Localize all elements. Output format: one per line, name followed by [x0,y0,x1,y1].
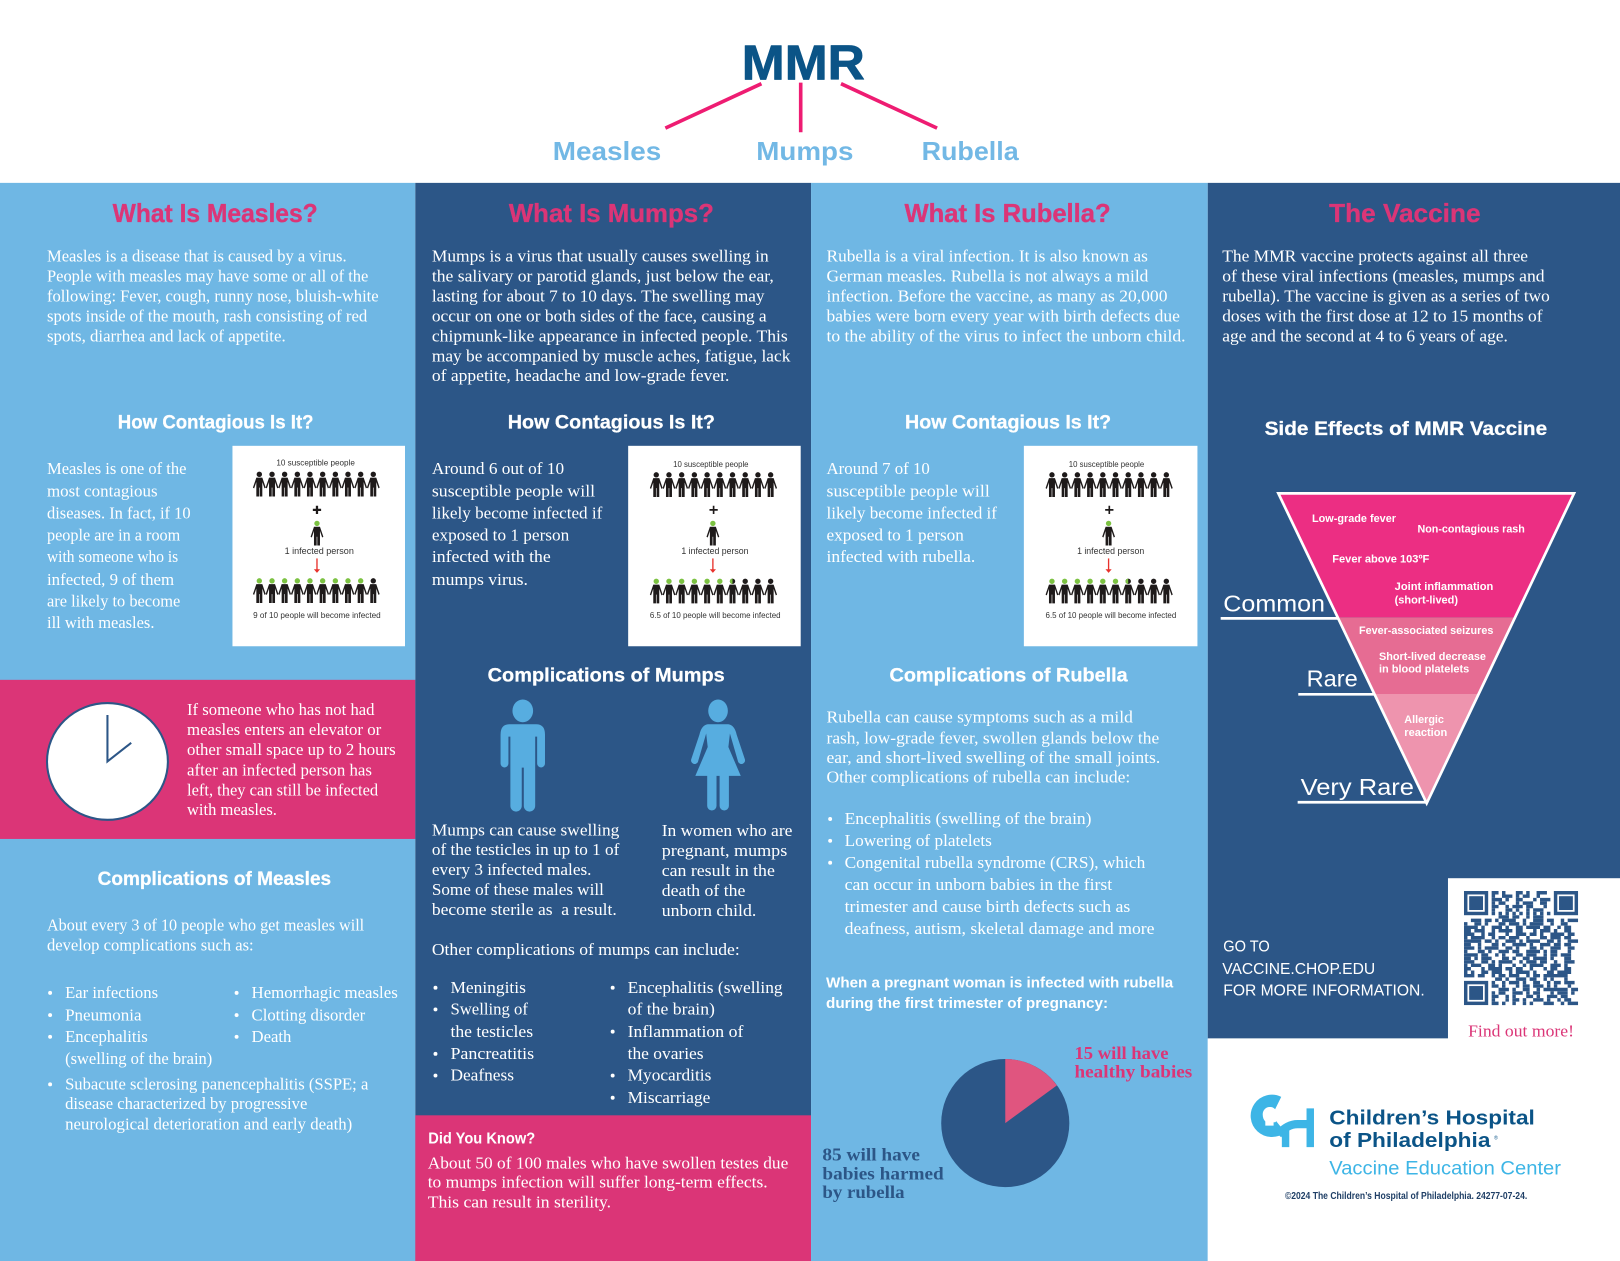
text: copyright: ©2024 The Children’s Hospital of Philadelphia. 24277-07-24. [1285,1191,1527,1202]
panel: vaccine [1208,183,1620,1040]
list: measles complications: Encephalitis [65,1027,148,1046]
label: Rubella: Rubella [922,138,1019,166]
list: measles complications: Ear infections [65,983,158,1002]
heading: complications of rubella: Complications of Rubella [890,664,1129,686]
text: measles contagion: diseases. In fact, if 10 [47,504,191,523]
text: measles contagion: with someone who is [47,547,178,566]
text: measles intro: spots inside of the mouth, rash consisting of red [47,306,368,325]
heading: complications of measles: Complications of Measles [98,868,331,890]
text: mumps intro: Mumps is a virus that usually causes swelling in [432,246,769,265]
labels: common effects: Non-contagious rash [1418,523,1525,535]
list: measles complications: Subacute sclerosing panencephalitis (SSPE; a [65,1074,369,1093]
text: hospital name: ® [1494,1135,1498,1142]
text: airborne note: with measles. [187,800,277,819]
heading: how contagious rubella: How Contagious Is It? [905,411,1111,433]
text: measles contagion: people are in a room [47,525,180,544]
diagram: 6.5 of 10 infected (rubella): 1 infected person [1077,546,1144,556]
callout: did you know: About 50 of 100 males who have swollen testes due [428,1154,788,1173]
list: measles complications: Hemorrhagic measles [252,983,398,1002]
text: rubella intro [827,246,1186,345]
list: rubella complications: can occur in unborn babies in the first [845,875,1113,894]
callout: did you know: to mumps infection will suffer long-term effects. [428,1173,768,1192]
list: measles complications: disease characterized by progressive [65,1094,307,1113]
list: measles complications: Pneumonia [65,1005,142,1024]
icon: CH logo [1258,1102,1310,1147]
chart: side effects pyramid [1221,493,1574,803]
labels: rare effects: Fever-associated seizures [1359,625,1493,637]
text: female complication: unborn child. [662,901,756,920]
text: female complication: In women who are [662,821,792,840]
text: rubella complications intro: ear, and short-lived swelling of the small joints. [827,748,1160,767]
text: mumps contagion: infected with the [432,547,551,566]
list: rubella complications: Lowering of platelets [845,831,992,850]
callout: did you know [415,1115,811,1261]
text: other complications: Other complications of mumps can include: [432,940,740,959]
text: rubella complications intro: rash, low-grade fever, swollen glands below the [827,728,1159,747]
list: mumps complications left [434,978,534,1085]
text: measles contagion [47,459,191,632]
labels: rare effects [1359,625,1493,676]
text: rubella intro: Rubella is a viral infection. It is also known as [827,246,1148,265]
text: complications intro [47,915,365,955]
diagram: 9 of 10 infected: 10 susceptible people [276,458,355,467]
text: vaccine education center: Vaccine Education Center [1329,1157,1561,1179]
list: mumps complications right: Inflammation of [628,1022,744,1041]
text: rubella contagion [827,459,998,566]
label: 15 healthy: healthy babies [1074,1062,1192,1082]
text: mumps intro: occur on one or both sides of the face, causing a [432,306,767,325]
text: mumps intro: of appetite, headache and low-grade fever. [432,366,729,385]
list: measles complications: (swelling of the brain) [65,1049,212,1068]
label: 85 harmed: by rubella [822,1182,905,1202]
labels: common effects: Low-grade fever [1312,513,1397,525]
list: mumps complications left: Deafness [450,1066,514,1085]
list: mumps complications left: the testicles [450,1022,533,1041]
text: measles intro [47,246,379,345]
text: airborne note [187,700,396,819]
text: mumps contagion [432,459,603,589]
text: rubella complications intro: Rubella can cause symptoms such as a mild [827,708,1134,727]
heading: What Is Measles: What Is Measles? [113,200,318,228]
text: pregnancy lead-in: When a pregnant woman is infected with rubella [826,976,1174,992]
text: hospital name: of Philadelphia [1329,1129,1491,1152]
labels: common effects: Joint inflammation [1395,581,1493,593]
text: measles contagion: infected, 9 of them [47,570,174,589]
list: measles complications [48,983,398,1133]
text: measles intro: People with measles may have some or all of the [47,267,368,286]
text: rubella intro: to the ability of the virus to infect the unborn child. [827,326,1186,345]
list: rubella complications [828,809,1155,938]
heading: What Is Mumps: What Is Mumps? [509,200,714,228]
list: rubella complications: Congenital rubella syndrome (CRS), which [845,853,1146,872]
heading: side effects: Side Effects of MMR Vaccine [1265,418,1547,440]
label: 85 harmed [822,1144,944,1202]
labels: very rare effects: reaction [1404,727,1447,739]
list: mumps complications left: Meningitis [450,978,526,997]
labels: rare effects: in blood platelets [1379,664,1469,676]
list: mumps complications right: the ovaries [628,1044,704,1063]
text: rubella contagion: Around 7 of 10 [827,459,930,478]
text: mumps contagion: Around 6 out of 10 [432,459,564,478]
text: female complication: can result in the [662,861,775,880]
text: male complication: Some of these males will [432,880,604,899]
heading: how contagious mumps: How Contagious Is It? [508,411,715,433]
text: mumps contagion: susceptible people will [432,481,596,500]
text: mumps intro: the salivary or parotid glands, just below the ear, [432,267,774,286]
diagram: 9 of 10 infected: 9 of 10 people will become infected [253,611,381,620]
list: rubella complications: deafness, autism, skeletal damage and more [845,919,1155,938]
text: rubella complications intro: Other complications of rubella can include: [827,768,1130,787]
diagram: 6.5 of 10 infected (mumps): 10 susceptible people [673,460,749,469]
icon: QR code [1464,893,1578,1003]
diagram: 6.5 of 10 infected (mumps): 1 infected person [681,546,749,556]
text: complications intro: About every 3 of 10 people who get measles will [47,915,365,934]
label: 15 healthy: 15 will have [1074,1043,1169,1063]
text: vaccine intro: of these viral infections (measles, mumps and [1222,267,1545,286]
text: rubella intro: German measles. Rubella is not always a mild [827,267,1149,286]
list: measles complications: Death [252,1027,292,1046]
title: MMR [742,35,865,91]
text: male complication: become sterile as a result. [432,900,617,919]
list: mumps complications left: Swelling of [450,1000,528,1019]
text: rubella contagion: exposed to 1 person [827,525,965,544]
text: airborne note: after an infected person has [187,760,372,779]
heading: how contagious measles: How Contagious Is It? [118,411,314,433]
labels: common effects [1312,513,1525,606]
list: measles complications: neurological deterioration and early death) [65,1114,352,1133]
text: airborne note: left, they can still be infected [187,781,379,800]
list: mumps complications right: Myocarditis [628,1066,711,1085]
text: mumps contagion: exposed to 1 person [432,525,570,544]
panel: rubella [811,183,1208,1261]
label: 85 harmed: 85 will have [822,1144,920,1164]
label: Mumps: Mumps [756,138,853,166]
text: rubella contagion: likely become infected if [827,504,998,523]
text: vaccine intro [1222,246,1550,345]
list: mumps complications right: Miscarriage [628,1088,710,1107]
text: measles contagion: most contagious [47,481,158,500]
text: rubella contagion: infected with rubella. [827,547,975,566]
text: male complication: of the testicles in up to 1 of [432,840,620,859]
labels: common effects: Fever above 103ºF [1332,554,1430,566]
list: rubella complications: trimester and cause birth defects such as [845,897,1130,916]
chart: pie of outcomes [941,1059,1069,1187]
panel: logo and credit [1208,1039,1620,1261]
text: mumps intro [432,246,791,385]
list: rubella complications: Encephalitis (swelling of the brain) [845,809,1092,828]
diagram: 6.5 of 10 infected (mumps) [628,446,801,646]
heading: complications of mumps: Complications of Mumps [488,664,725,686]
text: measles intro: following: Fever, cough, runny nose, bluish-white [47,287,379,306]
text: complications intro: develop complications such as: [47,936,254,955]
labels: very rare effects [1404,714,1447,739]
heading: What Is Rubella: What Is Rubella? [905,200,1111,228]
text: vaccine intro: The MMR vaccine protects against all three [1222,246,1528,265]
text: vaccine intro: rubella). The vaccine is given as a series of two [1222,287,1550,306]
text: male complication: every 3 infected males. [432,860,591,879]
diagram: 6.5 of 10 infected (mumps): 6.5 of 10 people will become infected [650,611,781,620]
text: mumps contagion: likely become infected if [432,504,603,523]
label: 15 healthy [1074,1043,1192,1082]
icon: clock [47,703,168,820]
text: rubella complications intro [827,708,1160,787]
text: go to website: VACCINE.CHOP.EDU [1222,961,1375,978]
text: airborne note: other small space up to 2 hours [187,740,396,759]
text: female complication: death of the [662,881,745,900]
diagram: 9 of 10 infected: 1 infected person [285,546,354,556]
text: female complication: pregnant, mumps [662,841,787,860]
label: Rare: Rare [1307,666,1358,692]
text: pregnancy lead-in: during the first trimester of pregnancy: [826,996,1108,1012]
text: vaccine intro: doses with the first dose at 12 to 15 months of [1222,306,1543,325]
label: Common: Common [1223,591,1325,617]
list: measles complications: Clotting disorder [252,1005,366,1024]
text: mumps intro: may be accompanied by muscle aches, fatigue, lack [432,347,791,366]
text: mumps contagion: mumps virus. [432,570,528,589]
text: vaccine intro: age and the second at 4 to 6 years of age. [1222,326,1508,345]
list: mumps complications right: of the brain) [628,1000,715,1019]
list: mumps complications left: Pancreatitis [450,1044,534,1063]
label: 85 harmed: babies harmed [822,1163,944,1183]
list: mumps complications right: Encephalitis (swelling [628,978,783,997]
text: pregnancy lead-in [826,976,1174,1012]
text: hospital name: Children’s Hospital [1329,1106,1535,1129]
label: Very Rare: Very Rare [1301,774,1414,800]
panel: mumps [415,183,811,1261]
connector lines [665,83,937,132]
labels: very rare effects: Allergic [1404,714,1444,726]
label: Measles: Measles [553,138,661,166]
text: measles contagion: Measles is one of the [47,459,186,478]
text: male complication [432,820,620,919]
header: MMR breakdown [553,35,1019,166]
text: airborne note: measles enters an elevator or [187,720,382,739]
text: go to website [1222,939,1425,999]
panel: measles [0,183,415,1261]
text: female complication [662,821,792,920]
text: mumps intro: lasting for about 7 to 10 days. The swelling may [432,287,765,306]
text: go to website: FOR MORE INFORMATION. [1223,982,1425,999]
text: airborne note: If someone who has not had [187,700,375,719]
diagram: 9 of 10 infected [232,446,405,646]
diagram: 6.5 of 10 infected (rubella) [1024,446,1197,646]
text: hospital name [1329,1106,1535,1152]
callout: two hours band [0,680,415,839]
labels: rare effects: Short-lived decrease [1379,651,1486,663]
callout: did you know: This can result in sterility. [428,1192,611,1211]
text: rubella intro: infection. Before the vaccine, as many as 20,000 [827,287,1167,306]
diagram: 6.5 of 10 infected (rubella): 6.5 of 10 people will become infected [1046,611,1177,620]
labels: common effects: (short-lived) [1395,594,1458,606]
text: measles contagion: ill with measles. [47,613,154,632]
diagram: 6.5 of 10 infected (rubella): 10 susceptible people [1069,460,1145,469]
text: find out more: Find out more! [1468,1021,1574,1040]
heading: The Vaccine: The Vaccine [1329,200,1481,228]
icon: female figure [691,699,745,811]
text: measles intro: Measles is a disease that is caused by a virus. [47,246,347,265]
icon: male figure [501,699,545,812]
callout: did you know: Did You Know? [428,1131,535,1148]
text: go to website: GO TO [1223,939,1270,956]
text: male complication: Mumps can cause swelling [432,820,619,839]
text: measles intro: spots, diarrhea and lack of appetite. [47,326,286,345]
text: measles contagion: are likely to become [47,591,180,610]
panel: QR block [1448,878,1620,1040]
text: rubella intro: babies were born every year with birth defects due [827,306,1180,325]
text: rubella contagion: susceptible people will [827,481,990,500]
text: mumps intro: chipmunk-like appearance in infected people. This [432,326,788,345]
list: mumps complications right [611,978,783,1107]
